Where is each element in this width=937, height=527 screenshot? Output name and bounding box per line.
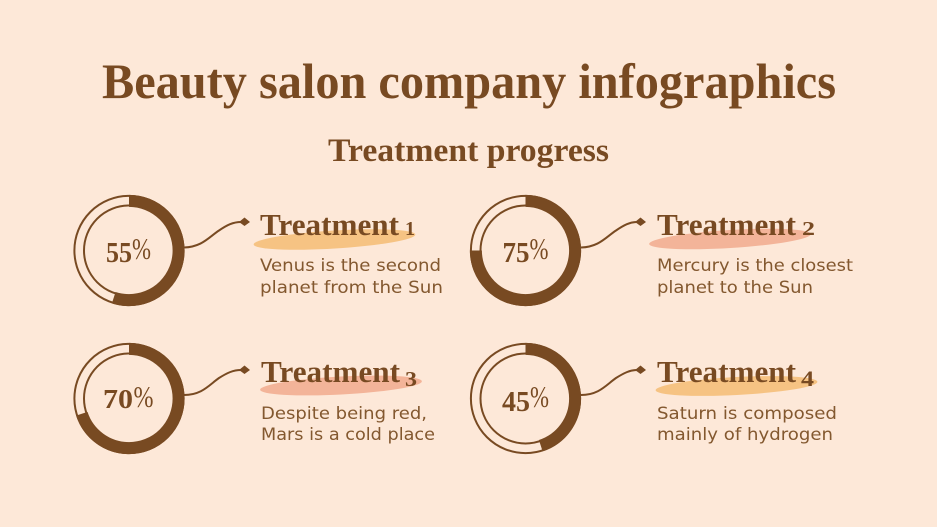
heading: treatment 4 with highlight: [655, 354, 818, 399]
heading: treatment 2 with highlight: Treatment: [657, 207, 797, 242]
text block: treatment 1: [260, 256, 443, 297]
text block: treatment 1: planet from the Sun: [260, 278, 443, 297]
connector arrow: [184, 218, 250, 248]
panel: treatment 1: [74, 196, 443, 305]
heading: treatment 4 with highlight: 4: [801, 366, 814, 391]
panel: treatment 2: [471, 196, 854, 305]
heading: treatment 1 with highlight: Treatment: [260, 207, 400, 242]
text block: treatment 3: [261, 404, 435, 444]
text block: treatment 4: Saturn is composed: [657, 404, 837, 423]
text block: treatment 2: [657, 256, 854, 297]
donut chart: 75%: [471, 196, 580, 305]
donut chart: 55%: [74, 196, 184, 305]
text block: treatment 1: Venus is the second: [260, 256, 441, 275]
heading: treatment 3 with highlight: 3: [405, 367, 417, 391]
text block: treatment 2: Mercury is the closest: [657, 256, 854, 275]
panel: treatment 4: [471, 344, 837, 453]
heading: treatment 4 with highlight: Treatment: [657, 354, 797, 389]
text block: treatment 4: [657, 404, 837, 444]
heading: treatment 2 with highlight: [649, 207, 815, 253]
heading: treatment 2 with highlight: 2: [802, 218, 815, 240]
connector arrow: [581, 366, 646, 395]
heading: treatment 3 with highlight: [260, 354, 422, 399]
text block: treatment 3: Mars is a cold place: [261, 425, 435, 444]
donut chart: 75%: 75: [502, 237, 530, 269]
donut chart: 45%: [471, 344, 580, 453]
donut chart: 45%: %: [530, 379, 549, 414]
heading: treatment 1 with highlight: [253, 207, 416, 253]
subtitle: Treatment progress: [328, 133, 609, 169]
text block: treatment 2: planet to the Sun: [657, 278, 813, 297]
panel: treatment 3: [74, 344, 435, 453]
donut chart: 45%: 45: [502, 386, 530, 418]
donut chart: 70%: %: [134, 379, 154, 414]
heading: treatment 1 with highlight: 1: [405, 218, 415, 240]
donut chart: 70%: [74, 344, 184, 453]
connector arrow: [581, 218, 646, 248]
donut chart: 55%: %: [132, 231, 151, 266]
text block: treatment 4: mainly of hydrogen: [657, 425, 833, 444]
text block: treatment 3: Despite being red,: [261, 404, 427, 423]
connector arrow: [184, 366, 250, 395]
donut chart: 75%: %: [530, 231, 548, 266]
donut chart: 70%: 70: [103, 384, 133, 414]
donut chart: 55%: 55: [106, 237, 132, 269]
heading: treatment 3 with highlight: Treatment: [261, 354, 401, 389]
title: Beauty salon company infographics: [102, 53, 836, 109]
